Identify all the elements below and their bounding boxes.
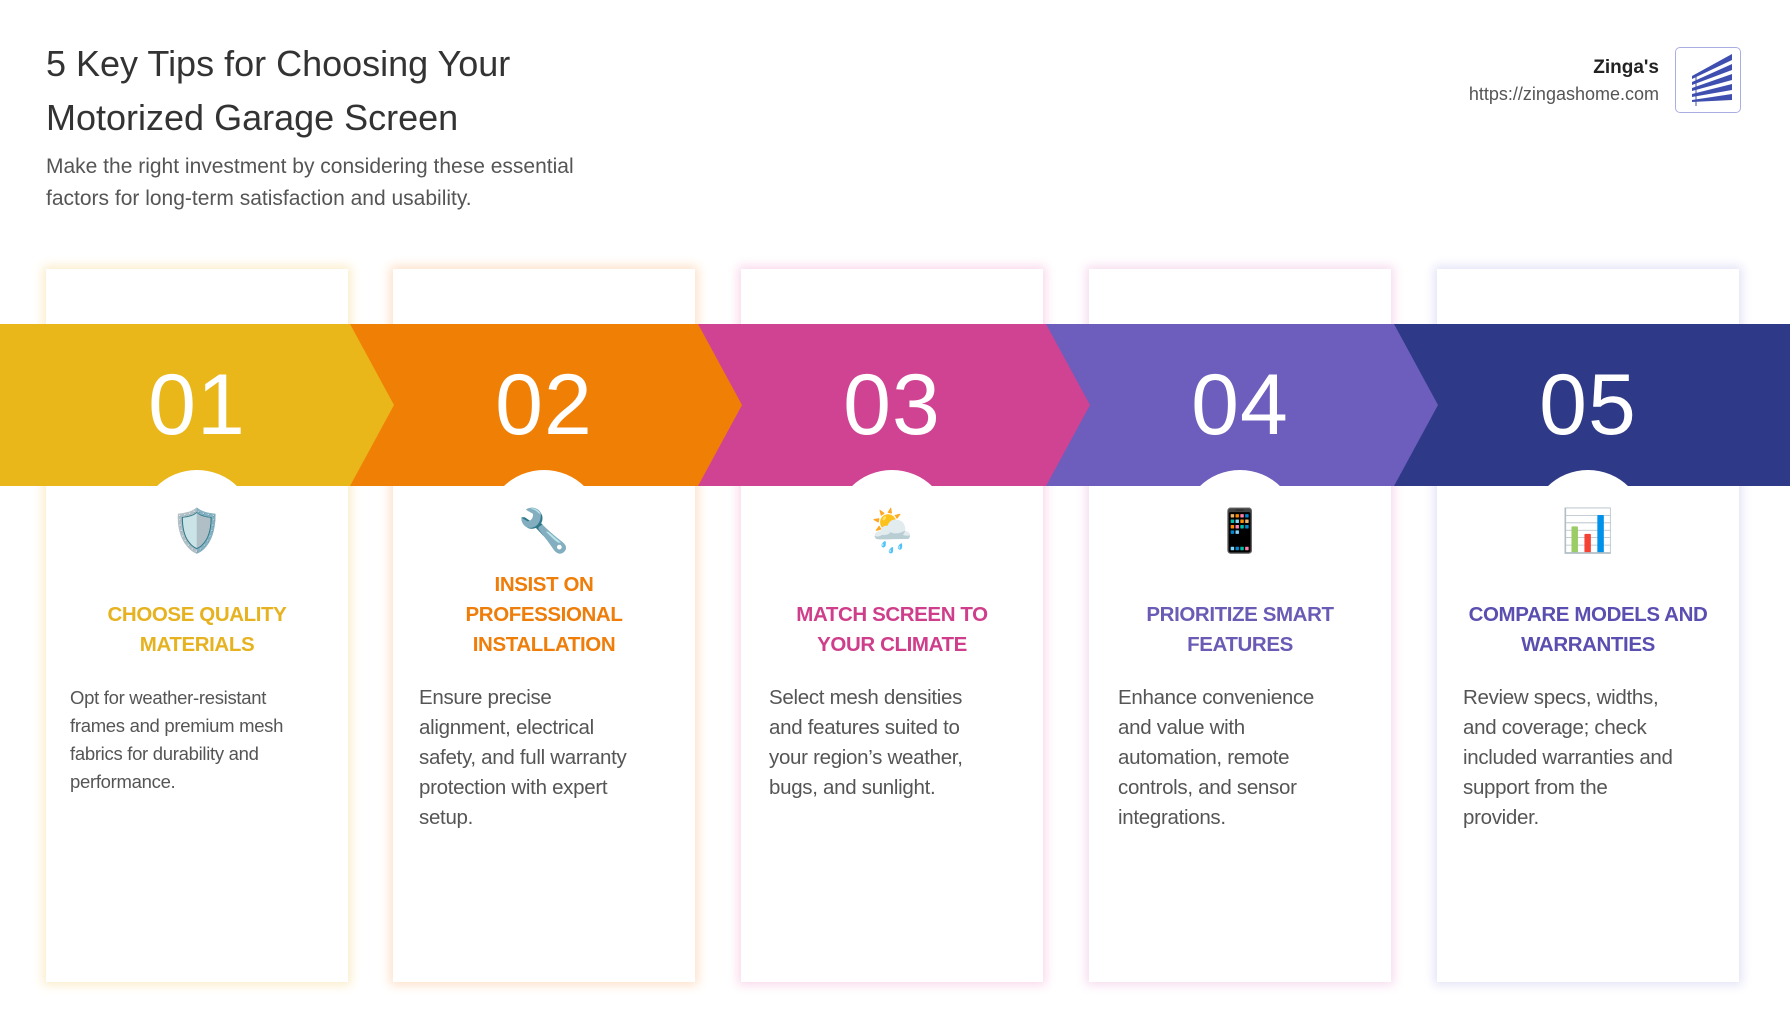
body texts: Opt for weather-resistant [70,687,266,708]
text: Enhance convenience [1118,686,1314,709]
text: provider. [1463,806,1539,829]
text: WARRANTIES [1521,633,1655,656]
title: Motorized Garage Screen [46,97,458,138]
arrow band [0,324,1790,486]
text: INSIST ON [495,573,593,596]
text: Ensure precise [419,686,552,709]
text: 📱 [1214,507,1266,554]
text: your region’s weather, [769,746,963,769]
circles [139,470,255,586]
icons: 🛡️ [171,507,223,554]
text: 04 [1191,357,1289,453]
title [46,43,510,138]
text: 02 [495,357,593,453]
body texts: fabrics for durability and [70,743,259,764]
text: alignment, electrical [419,716,594,739]
logo [1675,47,1741,113]
cards [46,269,348,982]
text: COMPARE MODELS AND [1469,603,1707,626]
subtitle: factors for long-term satisfaction and usability. [46,187,472,210]
body texts: performance. [70,771,175,792]
brand text: Zinga's [1593,57,1659,78]
headings [108,603,286,656]
text: 🌦️ [866,507,918,554]
text: support from the [1463,776,1607,799]
text: 03 [843,357,941,453]
text: setup. [419,806,473,829]
text: controls, and sensor [1118,776,1297,799]
text: YOUR CLIMATE [817,633,967,656]
subtitle: Make the right investment by considering these essential [46,155,574,178]
brand text [1469,57,1659,104]
text: PRIORITIZE SMART [1146,603,1334,626]
body texts [70,687,283,792]
body texts: frames and premium mesh [70,715,283,736]
text: and features suited to [769,716,960,739]
text: integrations. [1118,806,1226,829]
text: Review specs, widths, [1463,686,1658,709]
text: safety, and full warranty [419,746,626,769]
text: included warranties and [1463,746,1673,769]
headings: CHOOSE QUALITY [108,603,286,626]
numbers: 01 [148,357,246,453]
subtitle [46,155,574,210]
text: INSTALLATION [473,633,615,656]
headings: MATERIALS [140,633,254,656]
text: and value with [1118,716,1245,739]
text: bugs, and sunlight. [769,776,935,799]
text: PROFESSIONAL [466,603,622,626]
brand text: https://zingashome.com [1469,84,1659,104]
text: and coverage; check [1463,716,1646,739]
text: FEATURES [1187,633,1293,656]
text: protection with expert [419,776,607,799]
title: 5 Key Tips for Choosing Your [46,43,510,84]
text: 05 [1539,357,1637,453]
text: MATCH SCREEN TO [796,603,988,626]
text: 🔧 [518,507,570,554]
text: 📊 [1562,507,1614,554]
text: automation, remote [1118,746,1289,769]
text: Select mesh densities [769,686,962,709]
